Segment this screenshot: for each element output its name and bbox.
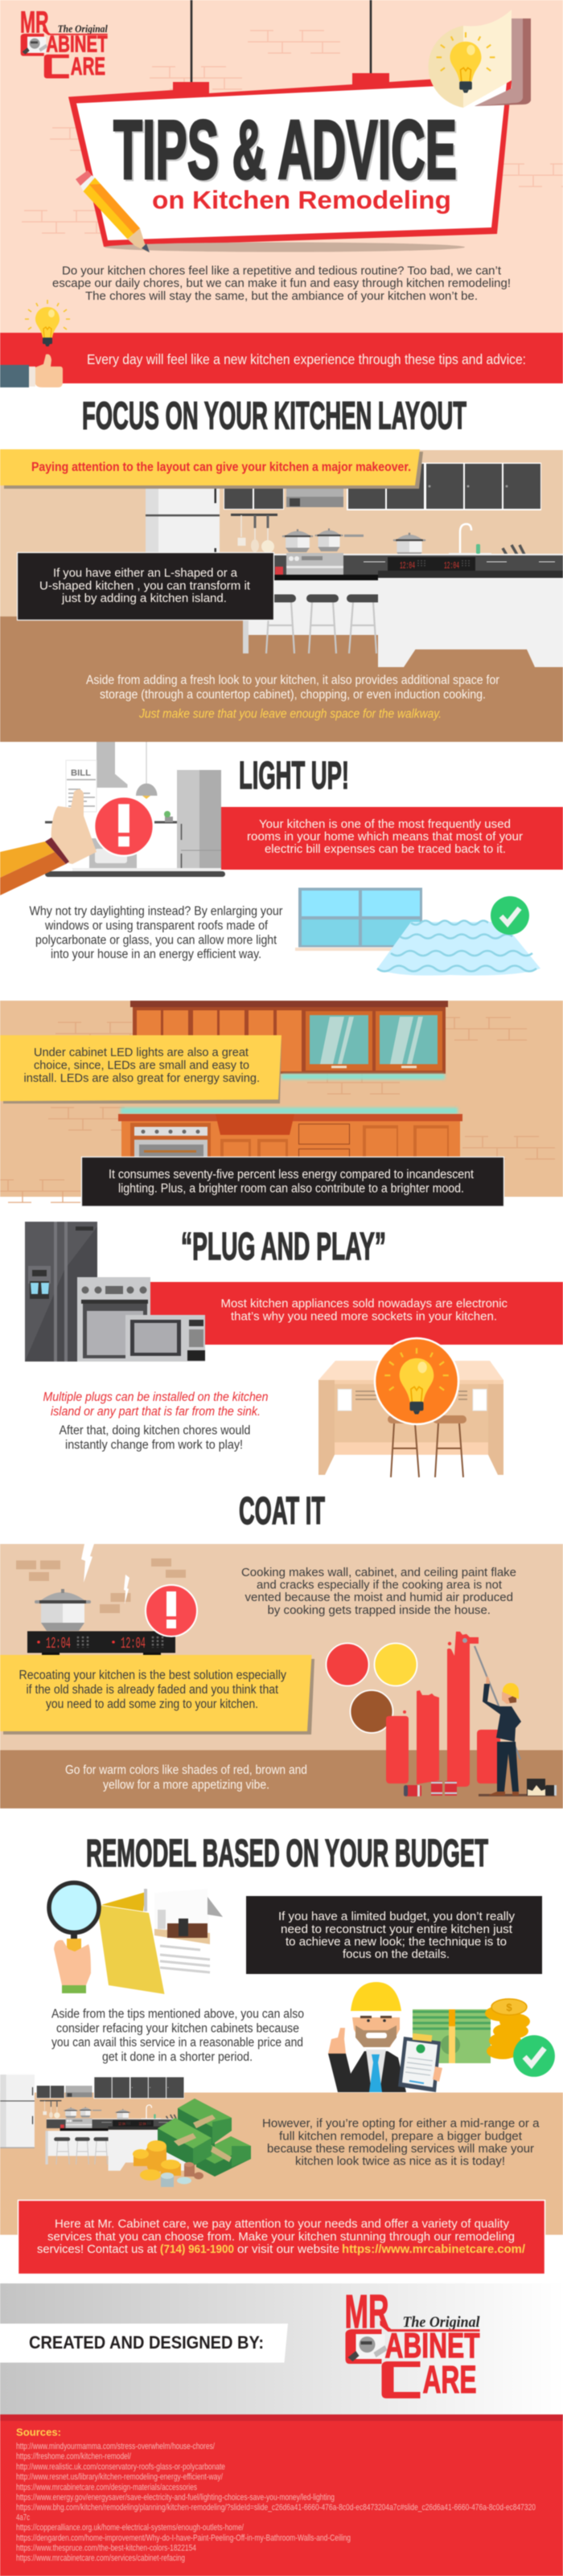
coat text: vented because the moist and humid air produced — [245, 1591, 513, 1604]
heading: plug and play: “PLUG AND PLAY” — [181, 1226, 386, 1268]
black box: island: just by adding a kitchen island. — [61, 592, 227, 605]
intro text — [52, 265, 511, 303]
black box: limited budget: need to reconstruct your entire kitchen just — [281, 1923, 512, 1936]
panel: light up — [0, 742, 563, 976]
panel: plug and play — [25, 1222, 563, 1477]
mid-range text: However, if you’re opting for either a mid-range or a — [262, 2117, 540, 2130]
red box: sockets: that’s why you need more sockets in your kitchen. — [231, 1310, 497, 1323]
icon: check — [513, 2035, 555, 2077]
mid-range text: kitchen look twice as nice as it is today! — [295, 2156, 505, 2169]
ribbon: layout: Paying attention to the layout can give your kitchen a major makeover. — [31, 461, 411, 474]
red callout: contact: (714) 961-1900 — [160, 2243, 234, 2256]
icon: small bulb — [25, 300, 70, 346]
source list: https://freshome.com/kitchen-remodel/ — [16, 2451, 132, 2461]
mid-range text: because these remodeling services will make your — [267, 2143, 534, 2156]
floor text: Aside from adding a fresh look to your kitchen, it also provides additional space for — [86, 674, 499, 687]
sign — [68, 73, 512, 252]
panel: kitchen layout — [0, 449, 563, 742]
refacing text: Aside from the tips mentioned above, you can also — [51, 2008, 304, 2021]
source list: https://www.energy.gov/energysaver/save-electricity-and-fuel/lighting-choices-save-you-money/led-lighting — [16, 2493, 335, 2503]
panel: created by — [0, 2283, 563, 2414]
yellow box: LED: install. LEDs are also great for energy saving. — [24, 1072, 260, 1085]
red callout: contact: or visit our website — [237, 2243, 339, 2256]
panel: full remodel — [0, 2074, 563, 2234]
floor text: warm colours — [65, 1763, 307, 1792]
hanging strings — [191, 0, 371, 84]
red callout: contact: https://www.mrcabinetcare.com/ — [342, 2243, 525, 2256]
logo — [20, 6, 108, 80]
icon: pot on induction — [27, 1589, 175, 1655]
black box: energy: lighting. Plus, a brighter room can also contribute to a brighter mood. — [118, 1182, 464, 1196]
black box: limited budget: If you have a limited budget, you don’t really — [278, 1910, 516, 1923]
plug text: After that, doing kitchen chores would — [60, 1424, 251, 1437]
coat text: Cooking makes wall, cabinet, and ceiling paint flake — [241, 1566, 516, 1579]
daylighting text: windows or using transparent roofs made of — [44, 919, 269, 932]
black box: island: If you have either an L-shaped or a — [53, 567, 238, 580]
black box: island — [18, 553, 273, 620]
black box: limited budget — [246, 1896, 542, 1974]
icon: alert — [94, 797, 154, 856]
icon: book with bulb — [429, 10, 531, 108]
red box: electric bill — [221, 807, 563, 870]
ribbon: created and designed by — [0, 2324, 288, 2363]
yellow box: recoating: you need to add some zing to your kitchen. — [46, 1698, 258, 1711]
illustration: kitchen bill — [0, 742, 225, 895]
yellow box: LED: choice, since, LEDs are small and easy to — [34, 1059, 249, 1072]
panel: LED lighting — [0, 1001, 563, 1206]
illustration: money and coins: $ — [506, 2001, 512, 2013]
panel: coat it — [0, 1544, 563, 1808]
intro text: escape our daily chores, but we can make it fun and easy through kitchen remodeling! — [52, 277, 511, 290]
illustration: money pile — [133, 2099, 251, 2187]
logo large — [344, 2286, 480, 2402]
black box: limited budget: focus on the details. — [343, 1948, 450, 1961]
plug text: island or any part that is far from the sink. — [51, 1405, 261, 1419]
icon: pot on induction: 12:04 — [46, 1635, 71, 1652]
ribbon: created and designed by: CREATED AND DESIGNED BY: — [29, 2332, 264, 2353]
upper cabinets — [130, 1001, 448, 1079]
black box: energy — [82, 1157, 503, 1206]
illustration: painter — [386, 1632, 557, 1796]
red callout: contact: services that you can choose from. Make your kitchen stunning through our remodeling — [47, 2231, 515, 2244]
source list: https://dengarden.com/home-improvement/Why-do-I-have-Paint-Peeling-Off-in-my-Bathroom-Walls-and-Ceiling — [16, 2533, 351, 2543]
illustration: appliances — [25, 1222, 205, 1362]
daylighting text: into your house in an energy efficient way. — [51, 948, 261, 961]
mid-range text: full kitchen remodel, prepare a bigger budget — [279, 2130, 522, 2143]
kitchen illustration — [146, 458, 563, 667]
icon: check — [491, 896, 529, 935]
source list: https://www.mrcabinetcare.com/design-materials/accessories — [16, 2483, 197, 2492]
red callout: contact: Here at Mr. Cabinet care, we pay attention to your needs and offer a variety of quality — [55, 2218, 510, 2231]
yellow box: recoating: Recoating your kitchen is the best solution especially — [19, 1669, 286, 1682]
banner — [0, 300, 563, 387]
source list: https://www.mrcabinetcare.com/services/cabinet-refacing — [16, 2553, 185, 2563]
bill — [66, 760, 97, 812]
daylighting text — [29, 905, 283, 961]
red box: electric bill: rooms in your home which means that most of your — [247, 831, 523, 844]
yellow box: recoating — [0, 1655, 314, 1734]
icon: orange circle bulb — [375, 1338, 458, 1424]
refacing text: you can avail this service in a reasonable price and — [51, 2036, 303, 2050]
plug text: instantly change from work to play! — [65, 1439, 243, 1452]
black box: island: U-shaped kitchen , you can transform it — [39, 580, 250, 593]
plug text: Multiple plugs can be installed on the kitchen — [43, 1390, 269, 1404]
refacing text: consider refacing your kitchen cabinets because — [56, 2022, 299, 2035]
icon: thumbs up — [0, 354, 63, 387]
panel: header — [0, 0, 563, 333]
floor text: warm colours: yellow for a more appetizing vibe. — [103, 1778, 269, 1792]
refacing text: get it done in a shorter period. — [102, 2050, 253, 2064]
floor text — [86, 674, 499, 721]
illustration: window and roof — [295, 887, 540, 976]
red box: sockets: Most kitchen appliances sold nowadays are electronic — [220, 1297, 508, 1310]
heading: coat it: COAT IT — [239, 1490, 325, 1533]
yellow box: LED: Under cabinet LED lights are also a great — [34, 1046, 249, 1059]
red box: electric bill: electric bill expenses can be traced back to it. — [265, 843, 506, 856]
source list: http://www.realistic.uk.com/conservatory-roofs-glass-or-polycarbonate — [16, 2463, 225, 2472]
icon: alert — [146, 1585, 197, 1636]
red callout: contact: services! Contact us at — [37, 2243, 157, 2256]
refacing text — [51, 2008, 304, 2064]
floor text: Just make sure that you leave enough space for the walkway. — [138, 707, 442, 721]
daylighting text: polycarbonate or glass, you can allow more light — [35, 934, 277, 947]
illustration: mini kitchen — [0, 2074, 195, 2171]
intro text: The chores will stay the same, but the ambiance of your kitchen won’t be. — [85, 290, 478, 303]
source list: http://www.resnet.us/library/kitchen-remodeling-energy-efficient-way/ — [16, 2472, 224, 2482]
coat text — [241, 1566, 516, 1617]
bill: BILL — [71, 768, 91, 778]
icon: pot on induction: 12:04 — [121, 1635, 146, 1652]
illustration: magnifier and brochure — [49, 1882, 223, 1994]
steam bolts — [81, 1544, 129, 1604]
daylighting text: Why not try daylighting instead? By enlarging your — [29, 905, 283, 918]
illustration: island with sockets — [318, 1338, 503, 1477]
red box: electric bill: Your kitchen is one of the most frequently used — [259, 818, 511, 831]
plug text — [43, 1390, 269, 1452]
source list: https://www.thespruce.com/the-best-kitchen-colors-1822154 — [16, 2543, 196, 2553]
coat text: and cracks especially if the cooking area is not — [257, 1579, 502, 1591]
hand with sleeve — [0, 789, 97, 895]
floor text: storage (through a countertop cabinet), chopping, or even induction cooking. — [100, 688, 486, 702]
illustration: money and coins — [413, 1999, 555, 2077]
panel: sources — [0, 2414, 563, 2576]
coat text: by cooking gets trapped inside the house. — [267, 1604, 491, 1617]
black box: limited budget: to achieve a new look; the technique is to — [286, 1935, 507, 1948]
decorative bricks — [16, 1558, 186, 1613]
illustration: contractor — [328, 1982, 442, 2092]
yellow box: LED — [0, 1035, 282, 1104]
intro text: Do your kitchen chores feel like a repetitive and tedious routine? Too bad, we can’t — [62, 265, 501, 278]
lower cabinets — [118, 1108, 462, 1162]
mid-range text — [262, 2117, 540, 2169]
icon: pencil — [76, 170, 150, 252]
floor text: warm colours: Go for warm colors like shades of red, brown and — [65, 1763, 307, 1777]
colour swatches — [327, 1643, 417, 1733]
subtitle: on Kitchen Remodeling — [152, 185, 451, 214]
sources heading: Sources: — [16, 2426, 61, 2439]
yellow box: recoating: if the old shade is already faded and you think that — [26, 1683, 279, 1697]
source list: http://www.mindyourmamma.com/stress-overwhelm/house-chores/ — [16, 2442, 216, 2451]
red callout: contact — [18, 2201, 545, 2275]
heading: light up: LIGHT UP! — [239, 755, 349, 797]
panel: budget — [49, 1882, 555, 2092]
black box: energy: It consumes seventy-five percent less energy compared to incandescent — [109, 1168, 475, 1182]
source list: 4a7c — [16, 2513, 30, 2522]
source list — [16, 2442, 536, 2563]
red box: sockets — [150, 1282, 563, 1345]
ribbon: layout — [0, 449, 423, 489]
source list: https://copperalliance.org.uk/home-electrical-systems/enough-outlets-home/ — [16, 2523, 245, 2533]
